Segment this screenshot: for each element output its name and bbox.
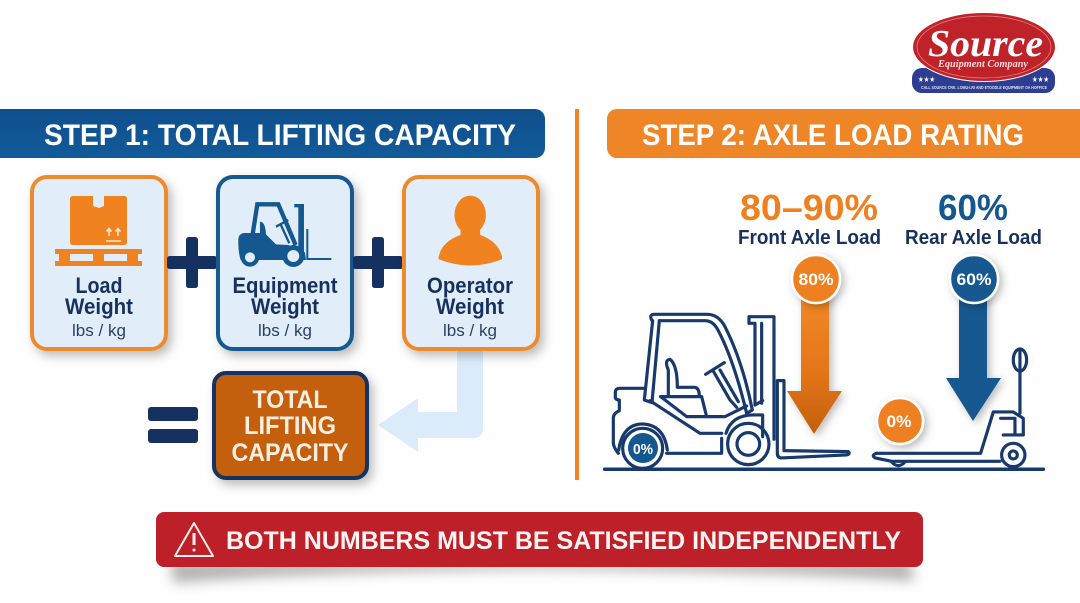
badge: pallet 0%: 0% [886, 412, 912, 431]
result box: total lifting capacity: LIFTING [244, 412, 336, 440]
pallet jack outline [873, 349, 1027, 467]
result box: total lifting capacity: TOTAL [252, 386, 328, 414]
rear wheel badge: 0% [628, 433, 658, 463]
step 1 heading: STEP 1: TOTAL LIFTING CAPACITY [44, 119, 516, 152]
card: operator weight: Operator [427, 273, 513, 298]
stat: front axle load [738, 187, 881, 249]
card: equipment weight: Equipment [232, 273, 338, 298]
panel: step 2 axle load rating [603, 109, 1080, 471]
forklift outline [613, 314, 849, 468]
icon: box on pallet [55, 196, 142, 266]
card: load weight: lbs / kg [72, 321, 126, 340]
step 2 heading [607, 109, 1080, 158]
card: equipment weight: lbs / kg [258, 321, 312, 340]
stat: rear axle load: 60% [938, 187, 1008, 228]
stat: front axle load: 80–90% [740, 187, 878, 228]
warning banner [156, 512, 923, 583]
panel: step 1 total lifting capacity [0, 109, 545, 478]
rear wheel badge: 0%: 0% [633, 441, 653, 458]
arrow: rear axle load 60%: 60% [956, 270, 992, 289]
badge: pallet 0% [877, 398, 923, 444]
divider between steps [575, 109, 579, 480]
icon: operator [438, 196, 502, 266]
stat: rear axle load [905, 187, 1042, 249]
step 2 heading: STEP 2: AXLE LOAD RATING [642, 119, 1024, 152]
arrow: operator weight to total [378, 350, 483, 452]
logo: Source Equipment Company [912, 12, 1056, 93]
plus sign 1 [167, 237, 217, 288]
logo: Source Equipment Company: CALL SOURCE CRK. LOMU-LRI AND ETOODLE EQUIPMENT OA HOFFICE [921, 85, 1047, 90]
card: operator weight: lbs / kg [443, 321, 497, 340]
arrow: front axle load 80% [787, 255, 842, 434]
card: equipment weight: Weight [251, 294, 320, 319]
card: load weight: Weight [65, 294, 134, 319]
stat: front axle load: Front Axle Load [738, 227, 881, 249]
card: equipment weight [218, 177, 352, 349]
equals sign [148, 407, 198, 443]
icon: warning triangle [175, 523, 213, 556]
result box: total lifting capacity: CAPACITY [232, 439, 349, 467]
card: load weight [32, 177, 166, 349]
card: operator weight: Weight [436, 294, 505, 319]
icon: forklift [238, 204, 331, 267]
plus sign 2 [353, 237, 403, 288]
logo: Source Equipment Company: Source [928, 23, 1043, 65]
arrow: rear axle load 60% [946, 255, 1001, 421]
card: operator weight [404, 177, 538, 349]
logo: Source Equipment Company: Equipment Company [937, 59, 1029, 70]
ground line [603, 468, 1045, 471]
arrow: front axle load 80%: 80% [798, 270, 834, 289]
result box: total lifting capacity [214, 373, 367, 478]
logo: Source Equipment Company: ★★★ [1032, 75, 1049, 84]
warning banner: BOTH NUMBERS MUST BE SATISFIED INDEPENDENTLY [226, 527, 901, 555]
stat: rear axle load: Rear Axle Load [905, 227, 1042, 249]
step 1 heading [0, 109, 545, 158]
card: load weight: Load [76, 273, 122, 298]
logo: Source Equipment Company: ★★★ [918, 75, 935, 84]
